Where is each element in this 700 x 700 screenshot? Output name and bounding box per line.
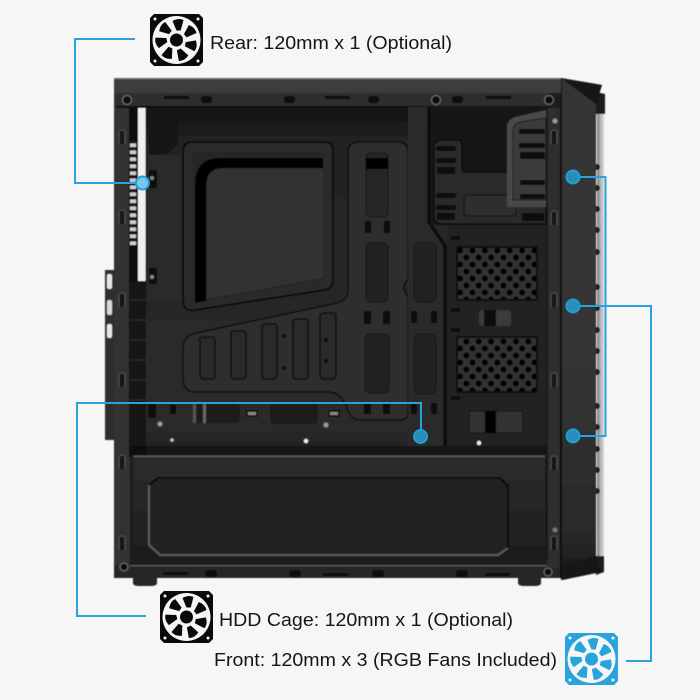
front panel	[561, 78, 602, 580]
drive cage lower	[451, 337, 537, 433]
rubber feet	[133, 578, 541, 586]
leader lines: front	[573, 177, 651, 661]
leader line: rear	[75, 39, 142, 183]
upper motherboard cutout	[183, 142, 333, 310]
lower tray features	[146, 404, 548, 456]
marker: HDD cage	[414, 430, 427, 443]
leader line: HDD cage	[77, 403, 421, 616]
motherboard tray	[146, 107, 548, 457]
label: rear: Rear: 120mm x 1 (Optional)	[210, 33, 452, 53]
drive bracket	[507, 110, 546, 207]
right tray column	[408, 107, 446, 456]
callout: front fans	[214, 170, 651, 685]
label: front: Front: 120mm x 3 (RGB Fans Included)	[214, 650, 557, 670]
PSU shroud	[133, 456, 545, 566]
drive cage upper	[451, 236, 537, 332]
markers: front	[566, 170, 580, 442]
bottom bar	[114, 563, 562, 578]
rear expansion bracket	[105, 270, 114, 440]
centre motherboard contour	[183, 142, 408, 420]
icon: rear fan	[150, 14, 203, 66]
callout: HDD cage fan	[77, 403, 513, 643]
icon: HDD cage fan	[160, 591, 213, 643]
top bars	[114, 78, 562, 108]
callout: rear fan	[75, 14, 452, 190]
icon: front fan	[565, 633, 618, 685]
label: HDD cage: HDD Cage: 120mm x 1 (Optional)	[219, 610, 513, 630]
chassis interior	[114, 78, 562, 578]
drive bay region	[431, 107, 548, 456]
left rail keyholes	[119, 130, 125, 550]
left rear column	[114, 92, 183, 578]
front panel backing strip	[594, 92, 605, 575]
PC case	[105, 78, 605, 586]
front rail with keyholes	[547, 108, 561, 578]
marker: rear	[136, 176, 149, 190]
